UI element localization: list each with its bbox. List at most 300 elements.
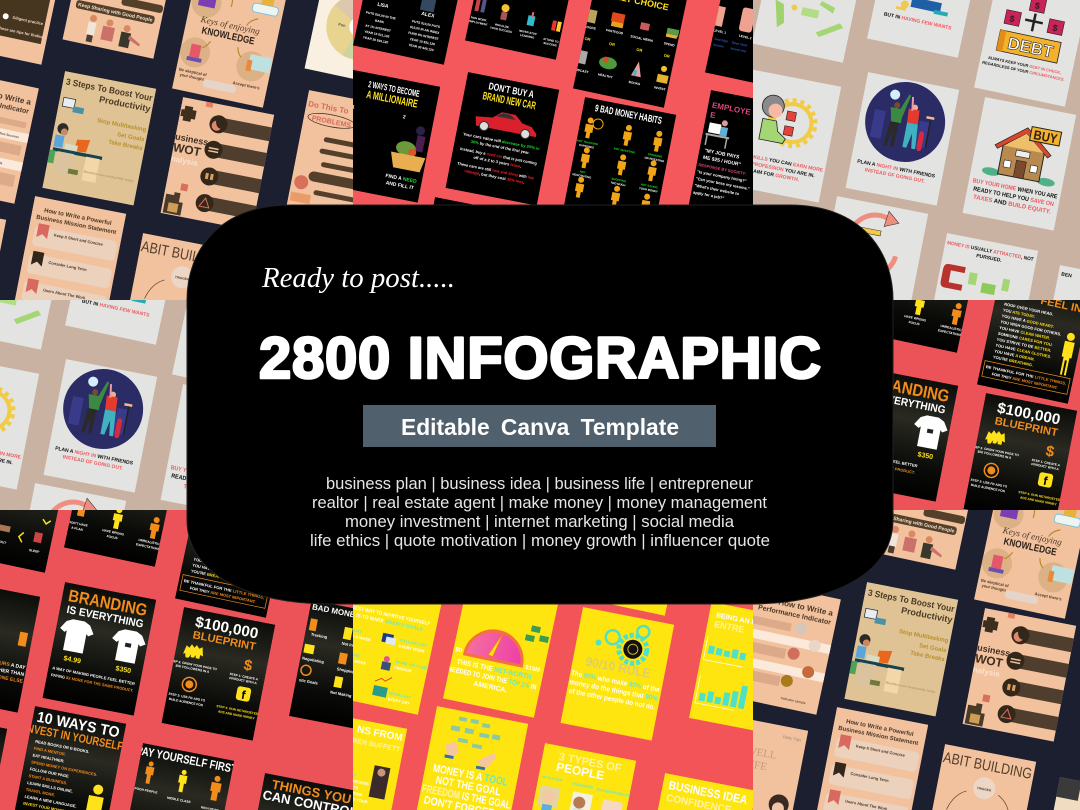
card: having few wants	[867, 0, 970, 58]
card: daily choice: OR	[636, 47, 643, 53]
panel: paper cards on tan, lower left repeat	[0, 300, 186, 510]
card: net worth gauge	[442, 583, 558, 718]
card: well life	[694, 713, 808, 810]
card: 9 bad money habits: SPENDING	[648, 152, 663, 159]
card: 100000 blueprint: STEP 2: USE FB ADS TO	[168, 692, 206, 703]
panel: black cards on red, right middle repeat	[753, 218, 1080, 527]
card: be thankful: FOR THEY ARE MOST IMPORTANT.	[189, 585, 256, 604]
card: daily choice: HEALTHY	[598, 72, 614, 80]
card: 3 steps repeat: 3 Steps To Boost Your	[867, 587, 956, 614]
card: weekly goals: READ ONE	[339, 649, 361, 658]
card: level 1 and level 2: Just high	[714, 37, 729, 44]
card: buy home repeat: TAXES AND BUILD	[183, 484, 238, 500]
card: buy your home: BUY YOUR HOME WHEN YOU ARE	[972, 178, 1058, 201]
card: success habits: YOUR SUCCESS	[490, 25, 512, 34]
panel: black cards on red, lower left	[0, 432, 403, 810]
card: branding is everything: BRANDING	[67, 586, 149, 620]
card: 3 steps to boost your productivity: Take Breaks	[108, 140, 144, 152]
card: keys of enjoying knowledge repeat: your thought	[981, 583, 1007, 593]
card: bad money habits: BAD MONEY	[311, 602, 362, 621]
card: 10 ways to invest in yourself: START A BUSINESS.	[28, 773, 68, 786]
card: grateful in life repeat: YOU HAVE CLEAN CLOTHES.	[995, 342, 1052, 359]
card: branding is everything repeat: BRANDING	[869, 372, 951, 406]
card: branding is everything: $350	[115, 665, 132, 675]
card: grateful in life repeat: YOU WISH GOOD FOR OTHERS.	[1000, 319, 1062, 337]
card: weekly goals: BOOK A WEEK	[338, 655, 367, 666]
card: level 1 and level 2: invest rest	[730, 46, 747, 54]
card: do this to problems: PROBLEMS	[311, 115, 352, 130]
card: level 1 and level 2: LEVEL 1	[713, 28, 727, 35]
card: pay yourself first: MIDDLE CLASS	[167, 796, 191, 804]
card: habit building repeat	[922, 744, 1036, 810]
card: lisa and alex: AT 1% INTEREST	[365, 24, 391, 33]
card: money is attracted: PURSUED.	[976, 253, 1003, 264]
card: bad money habits: Negotiating	[302, 655, 325, 665]
card: bad money habits: Shopping	[336, 666, 356, 675]
card: bad money habits: Not Investing	[341, 641, 368, 650]
card: 9 bad money habits: 9 BAD MONEY HABITS	[594, 103, 663, 127]
card: debt repeat	[172, 307, 186, 378]
card: 2 ways to become a millionaire: 1	[351, 104, 355, 111]
card: 100000 blueprint repeat	[959, 392, 1078, 527]
card: business SWOT analysis: WOT	[172, 140, 203, 159]
card: keys of enjoying knowledge: KNOWLEDGE	[200, 25, 256, 47]
card: 9 bad money habits: SHOPPING	[611, 177, 626, 183]
card: employee: "What's their website to	[694, 183, 740, 196]
card: wrong focus: A PLAN	[71, 526, 84, 532]
card: debt repeat: ALWAYS KEEP YOUR	[197, 344, 249, 361]
card: business ideas	[642, 773, 756, 810]
card: 3 steps to boost your productivity	[42, 71, 156, 206]
card: keys of enjoying knowledge repeat: KNOWLEDGE	[1002, 536, 1058, 558]
card: having few wants: BUT IN HAVING FEW WANTS	[883, 11, 953, 32]
card: net worth gauge: THIS IS THE NET-WORTH	[456, 659, 532, 681]
card: 100000 blueprint: $100,000	[194, 614, 260, 642]
card: 10 ways to invest in yourself: TRAVEL MORE.	[25, 787, 56, 797]
card: weekly goals: MAKE A WEEK	[343, 631, 372, 642]
card: branding is everything repeat	[844, 368, 958, 502]
card: success habits	[465, 0, 568, 60]
card: 100000 blueprint repeat: STEP 1: CREATE A	[1031, 458, 1061, 468]
card: business SWOT analysis	[160, 97, 274, 231]
card: bad money habits	[289, 600, 403, 734]
card: reload arrows repeat	[30, 483, 126, 510]
card: 3 steps repeat	[844, 582, 958, 717]
card: mission statement repeat: Keep It Short and Concise	[855, 743, 906, 758]
card: employee	[688, 90, 753, 204]
card: lessons from: FIRST	[344, 771, 357, 778]
card: 9 bad money habits: YOUR MONEY	[639, 186, 658, 194]
card: wrong focus: DON'T HAVE	[68, 520, 88, 528]
card: lisa and alex: PUTS $10,00 PUTS	[412, 19, 440, 29]
card: keys of enjoying knowledge: Keys of enjoying	[199, 14, 261, 36]
card: daily choice	[569, 0, 688, 108]
card: bottom hidden	[434, 197, 473, 204]
card: 100000 blueprint: 50K FOLLOWERS IN A	[175, 664, 210, 674]
card: 3 types of people: ENGINEER	[572, 781, 593, 790]
card: 3 types of people	[522, 743, 636, 810]
card: 100000 blueprint: STEP 3: GROW YOUR PAGE TO	[169, 658, 218, 671]
panel: peach cards on navy, lower right repeat	[694, 435, 1080, 810]
card: 3 steps repeat: Set Goals	[918, 643, 947, 654]
card: grateful in life repeat: SOMEONE CARES FOR YOU.	[998, 331, 1053, 347]
card: branding is everything: A WAY OF MAKING PEOPLE FEEL BETTER	[52, 665, 135, 686]
card: photo at far right	[1037, 777, 1080, 810]
text block: keyword list	[310, 475, 770, 550]
card: 3 types of people: PEOPLE	[555, 760, 605, 783]
card: buy your home: READY TO HELP YOU SAVE ON	[973, 186, 1054, 208]
card: keys of enjoying knowledge repeat: Keys of enjoying	[1001, 525, 1063, 547]
card: wrong focus repeat: EXPECTATIONS	[938, 328, 962, 337]
card: 2 ways to become a millionaire: 2 WAYS TO BECOME	[368, 79, 420, 99]
card: 10 ways to invest in yourself: READ BOOKS OR E-BOOKS.	[35, 739, 90, 754]
card: don't buy a brand new car: mileage, but they cost 30% less.	[464, 168, 525, 185]
card: 100000 blueprint repeat: STEP 3: GROW YOUR PAGE TO	[971, 444, 1020, 457]
card: buy home repeat	[160, 384, 186, 505]
card: lessons from: ASSETS	[342, 782, 359, 790]
text block: keyword list: money investment | internet marketing | social media	[345, 513, 735, 531]
card: having few wants repeat	[65, 300, 166, 345]
card: reload arrows	[834, 196, 928, 300]
card: mission statement repeat: How to Write a Powerful	[845, 719, 914, 738]
card: buy home repeat: BUY YOUR HOME WHEN YOU ARE	[170, 465, 256, 488]
card: weekly goals: ONE DAY	[344, 626, 363, 634]
card: dark tips box	[0, 0, 56, 65]
card: success habits: SUCCESS	[543, 41, 557, 48]
card: employee: "MY JOB PAYS	[704, 148, 740, 161]
card: 9 bad money habits: NOT TRACKING	[576, 138, 598, 146]
card: daily choice: INVEST	[654, 85, 666, 92]
card: wrong focus: EXPECTATIONS	[136, 542, 160, 551]
card: don't buy a brand new car: These cars are still new and shiny with low	[457, 161, 535, 181]
card: be thankful: BE THANKFUL FOR THE LITTLE THINGS,	[183, 578, 265, 600]
card: daily choice: OR	[663, 53, 670, 59]
card: keys of enjoying knowledge: Accept there's	[232, 80, 261, 91]
card: 3 types of people: INVESTOR	[542, 774, 563, 783]
card: branding is everything: PAYING $X MORE FOR THE SAME PRODUCT.	[51, 672, 134, 693]
card: be thankful: YOU HAVE A DREAM.	[192, 562, 233, 576]
card: branding is everything repeat: $350	[917, 451, 934, 461]
card: 100000 blueprint: ADS AND MAKE MONEY	[218, 709, 256, 721]
card: 2 ways to become a millionaire	[353, 70, 440, 203]
card: well life: Daily Tips	[782, 734, 803, 743]
card: success habits: VISUALIZE	[494, 22, 510, 29]
card: plan a night in repeat	[43, 359, 157, 493]
card: lisa and alex: FUND 8% INTEREST	[408, 31, 439, 41]
card: 100000 blueprint repeat: f	[1042, 474, 1050, 488]
card: plan a night in repeat: PLAN A NIGHT IN WITH FRIENDS	[55, 446, 134, 467]
card: having few wants repeat: BUT IN HAVING FEW WANTS	[81, 298, 151, 319]
card: level 1 and level 2: Save most	[731, 40, 749, 48]
card: lessons from: EMOTIONS	[341, 788, 363, 797]
card: lisa and alex: YEAR 10 $11,130	[364, 30, 390, 39]
card: don't buy a brand new car: DON'T BUY A	[488, 81, 535, 101]
card: 100000 blueprint: $	[242, 657, 254, 675]
card: 100000 blueprint repeat: ADS AND MAKE MONEY	[1020, 495, 1058, 507]
card: plan a night in repeat: INSTEAD OF GOING OUT.	[62, 454, 124, 472]
card: money is a tool: NOT THE GOAL	[435, 774, 502, 799]
card: buy home repeat: READY TO HELP YOU SAVE ON	[171, 473, 252, 495]
card: grateful in life repeat: YOU HAVE A DREAM.	[994, 348, 1035, 362]
card: weekly goals: IS TO MAKE WEEKLY GOALS	[356, 613, 424, 633]
card: keys of enjoying knowledge	[172, 0, 287, 108]
card: buy your home: TAXES AND BUILD EQUITY.	[973, 195, 1052, 216]
card: keep sharing with good people: Keep Sharing with Good People	[77, 2, 153, 24]
card: 10 ways to invest in yourself: LEARN SKILLS ONLINE.	[27, 780, 73, 794]
card: 100000 blueprint: f	[240, 688, 248, 702]
card: employee: EMPLOYE	[711, 101, 752, 117]
card: being an entrepreneur charts: BEING AN E	[715, 612, 757, 627]
card: 10 ways to invest in yourself: LEARN A NEW LANGUAGE.	[24, 794, 77, 809]
card: plan a night in with friends: PLAN A NIGHT IN WITH FRIENDS	[857, 159, 936, 180]
card: right edge: BEN	[1061, 271, 1073, 279]
card: be thankful: YOU HAVE CLEAN CLOTHES.	[193, 556, 250, 573]
card: success habits: LEARNING	[520, 33, 535, 40]
card: 9 bad money habits: NOT	[579, 169, 586, 175]
card: SWOT repeat: nalysis	[972, 665, 1001, 679]
card: wrong focus	[63, 432, 181, 567]
card: employee: E	[709, 110, 717, 120]
card: plan a night in with friends: INSTEAD OF GOING OUT.	[864, 167, 926, 185]
card: 100000 blueprint repeat: STEP 2: USE FB ADS TO	[970, 478, 1008, 489]
text block: keyword list: life ethics | quote motivation | money growth | influencer quote	[310, 532, 770, 550]
card: SWOT repeat: usiness	[976, 642, 1011, 659]
card: 100000 blueprint repeat: STEP 4: RUN RETARGETED	[1018, 490, 1061, 502]
card: 100000 blueprint: STEP 4: RUN RETARGETED	[216, 704, 259, 716]
card: grateful in life repeat: YOU STRIVE TO BE BETTER.	[996, 337, 1052, 353]
card: hours a day	[0, 579, 40, 713]
card: things you can control: THINGS YOU	[271, 777, 353, 807]
card: 10 ways to invest in yourself: FIND A MENTOR.	[33, 746, 66, 757]
card: money is attracted	[934, 233, 1038, 300]
card: 3 steps repeat: Maximize your productivity today	[885, 680, 936, 694]
card: well life edge	[0, 218, 6, 252]
card: performance indicator repeat: Performance Indicator	[757, 604, 832, 627]
card: level 1 and level 2	[705, 0, 753, 83]
card: daily choice: SOCIAL MEDIA	[630, 34, 654, 43]
card: money is a tool: MONEY IS A TOOL	[432, 762, 509, 789]
card: debt	[974, 0, 1080, 107]
card: success habits: NEVER STOP	[519, 29, 537, 36]
card: grateful in life repeat: BE THANKFUL FOR THE LITTLE THINGS,	[985, 364, 1067, 386]
card: mission statement: How to Write a Powerful	[43, 208, 112, 227]
card: pay yourself first: PAY YOURSELF FIRST	[135, 743, 239, 776]
card: gear and checklist: AIM FOR GROWTH.	[753, 169, 800, 183]
card: mission statement repeat: Business Mission Statement	[838, 726, 919, 747]
card: 10 ways to invest in yourself: FOLLOW OUR PAGE	[29, 766, 70, 779]
card: daily choice: OR	[584, 36, 591, 42]
card: lisa and alex	[353, 0, 468, 65]
card: top left partial	[0, 438, 69, 573]
card: habit building repeat: TRIGGER	[977, 786, 992, 793]
card: 3 steps to boost your productivity: Maximize your productivity today	[83, 169, 134, 183]
card: don't buy a brand new car: BRAND NEW CAR	[481, 90, 537, 112]
card: 3 steps to boost your productivity: Productivity	[98, 94, 151, 114]
card: performance indicator repeat: Indicator sample	[780, 696, 806, 705]
card: 9 bad money habits: NOT SAVING	[640, 182, 658, 189]
card: keys of enjoying knowledge repeat: Accept there's	[1034, 591, 1063, 602]
card: 100000 blueprint: BLUEPRINT	[192, 629, 257, 653]
card: business ideas: BUSINESS IDEA	[667, 778, 749, 807]
card: 90/10 rule: 90/10 RULE	[584, 654, 652, 681]
card: daily choice: BOOKS	[628, 80, 641, 86]
card: 10 ways to invest in yourself: SPEND MONEY ON EXPERIENCES.	[31, 759, 98, 777]
card: level 1 and level 2: income	[713, 43, 725, 49]
card: don't buy a brand new car: Your cars value will decrease by 20% in	[463, 131, 541, 151]
card: life wheel pie chart: Health	[355, 45, 369, 52]
panel: yellow cards on red, bottom center	[293, 481, 803, 810]
card: don't buy a brand new car	[445, 72, 559, 206]
card: net worth gauge: $0	[455, 647, 463, 654]
card: bad money habits: Not Making	[330, 689, 353, 698]
card: weekly goals: FOLLOW LIST	[400, 637, 428, 648]
card: 100000 blueprint repeat: BUILD AUDIENCE FOR	[970, 483, 1006, 494]
card: life wheel pie chart: Fun	[338, 22, 347, 28]
card: performance indicator	[0, 69, 39, 204]
card: 2 ways to become a millionaire: 2	[402, 114, 406, 121]
card: 100000 blueprint: PRODUCT WITH A	[229, 676, 258, 685]
card: weekly goals: EVERY WEEK	[398, 643, 425, 654]
card: success habits: NON WORK	[471, 15, 487, 22]
card: weekly goals: READ	[333, 676, 345, 684]
card: employee: "Can your boss my resume."	[695, 176, 750, 191]
card: 10 ways to invest in yourself: INVEST IN YOURSELF	[23, 721, 124, 753]
card: 3 types of people: 3 TYPES OF	[558, 751, 623, 775]
card: money bills	[753, 0, 856, 63]
card: wrong focus repeat: HAVE WRONG	[904, 314, 927, 323]
card: weekly goals: EVERY DAY	[387, 696, 411, 706]
card: success habits: EMPLOYMENT	[468, 19, 488, 27]
card: debt: $	[1052, 23, 1059, 33]
card: mission statement: Keep It Short and Concise	[53, 232, 104, 247]
card: 100000 blueprint repeat: BLUEPRINT	[994, 415, 1059, 439]
card: mission statement repeat	[814, 707, 928, 810]
card: SWOT repeat	[962, 608, 1076, 742]
card: gear and checklist: YOUR SKILLS YOU CAN EARN MORE	[734, 151, 824, 174]
card: branding is everything: IS EVERYTHING	[66, 604, 144, 631]
card: be thankful	[175, 483, 290, 618]
card: daily choice: OR	[609, 41, 616, 47]
card: 2 ways to become a millionaire: A MILLIONAIRE	[365, 89, 419, 111]
card: 2 ways to become a millionaire: AND FILL IT	[385, 180, 414, 191]
card: life wheel pie chart	[304, 0, 353, 79]
card: 3 steps to boost your productivity: 3 Steps To Boost Your	[65, 76, 154, 103]
card: grateful in life repeat	[977, 269, 1080, 408]
card: keep sharing repeat	[864, 435, 980, 570]
card: wrong focus repeat: FOCUS	[908, 320, 920, 326]
card: branding is everything repeat: THE SAME PRODUCT.	[873, 462, 916, 475]
text block: keyword list: business plan | business idea | business life | entrepreneur	[326, 475, 753, 493]
card: debt: DEBT	[1006, 34, 1056, 62]
card: right edge	[1053, 265, 1080, 300]
card: buy your home	[962, 97, 1076, 231]
card: 9 bad money habits	[564, 97, 676, 204]
card: lisa and alex: YEAR 10 $31,128	[409, 37, 435, 46]
card: grateful in life repeat: ROOF OVER YOUR HEAD.	[1004, 301, 1054, 317]
card: branding is everything repeat: IS EVERYTHING	[868, 390, 946, 417]
card: well life: LIFE	[743, 757, 768, 773]
card: lisa and alex: ALEX	[421, 11, 436, 20]
card: left small	[0, 711, 7, 810]
card: SWOT repeat: WOT	[974, 651, 1005, 670]
banner: editable canva template: Editable Canva Template	[401, 414, 679, 440]
card: grateful in life repeat: YOU'RE BREATHING.	[993, 354, 1034, 368]
card: employee: apply for a job?"	[693, 190, 725, 200]
card: wrong focus repeat: UNREALISTIC	[940, 324, 963, 332]
card: employee: "Is your company hiring?"	[697, 169, 747, 183]
card: gear repeat	[0, 356, 39, 490]
card: gear and checklist	[753, 70, 842, 202]
card: 100000 blueprint: STEP 1: CREATE A	[229, 672, 259, 682]
card: lisa and alex: $10,00 IN AN INDEX	[410, 25, 441, 35]
card: bad money habits: stic Goals	[299, 677, 319, 686]
card: top left partial: SLEEP	[29, 548, 41, 554]
card: weekly goals	[327, 580, 442, 715]
card: lessons from	[293, 711, 407, 810]
card: mission statement: Users About The Work	[43, 287, 87, 301]
card: don't buy a brand new car: 30% by the end of the first year.	[470, 139, 530, 155]
card: habit building: TRIGGER	[175, 275, 190, 282]
card: 9 bad money habits: ON INVESTING	[644, 156, 665, 163]
card: gear and checklist: THE PROFESSION YOU ARE IN.	[740, 159, 816, 179]
text: ready to post: Ready to post.....	[261, 263, 455, 294]
card: 100000 blueprint	[157, 606, 276, 741]
card: 100000 blueprint repeat: $	[1044, 443, 1056, 461]
card: daily choice: FASTFOOD	[606, 28, 624, 36]
card: 3 steps repeat: Take Breaks	[910, 651, 946, 663]
card: branding is everything: $4.99	[63, 655, 82, 665]
card: business SWOT analysis: usiness	[174, 131, 209, 148]
card: 90/10 rule: The 90% who make 90% of the	[570, 670, 660, 694]
card: top sliver	[574, 481, 689, 616]
card: wrong focus: FOCUS	[106, 534, 118, 540]
text block: keyword list: realtor | real estate agent | make money | money management	[312, 494, 767, 512]
card: lisa and alex: LISA	[377, 2, 389, 10]
card: lessons from: WARREN BUFFETT	[336, 734, 401, 754]
card: branding is everything	[42, 582, 156, 716]
card: debt: ALWAYS KEEP YOUR DEBT IN CHECK,	[988, 55, 1062, 75]
card: branding is everything repeat: PEOPLE FEEL BETTER	[873, 455, 918, 468]
card: habit building: ABIT BUILDING	[140, 238, 231, 272]
card: grateful in life repeat: FOR THEY ARE MOST IMPORTANT.	[991, 371, 1058, 390]
card: success habits: ATTEND TO	[543, 37, 560, 44]
card: 10 ways to invest in yourself: EAT HEALTHIER.	[32, 752, 65, 764]
card: 3 steps to boost your productivity: Stop Multitasking	[96, 118, 147, 134]
card: 2 ways to become a millionaire: FIND A NEED	[385, 173, 417, 185]
card: keys of enjoying knowledge: your thought	[179, 72, 205, 82]
card: 90/10 rule: money do the things that 90%	[569, 679, 659, 703]
card: 10 ways to invest in yourself: 10 WAYS TO	[35, 709, 121, 742]
card: keys of enjoying knowledge: Be skeptical of	[179, 67, 208, 77]
card: 100000 blueprint repeat: $100,000	[996, 400, 1062, 428]
panel: main black rounded title panel	[187, 205, 893, 604]
card: wrong focus repeat	[866, 218, 983, 353]
card: keep sharing with good people	[62, 0, 166, 59]
card: weekly goals: WORK OUT	[388, 690, 412, 700]
card: being an entrepreneur charts	[689, 602, 803, 736]
card: pay yourself first: POOR PEOPLE	[134, 786, 158, 795]
card: lessons from: BEHIND YOUR	[340, 794, 368, 804]
card: habit building	[130, 233, 203, 300]
panel: paper cards on tan, top right	[753, 0, 1080, 300]
card: dark tips box: Diligent practice	[12, 15, 44, 26]
card: grateful in life repeat: YOU ATE TODAY.	[1003, 307, 1036, 319]
card: lisa and alex: PUTS $10,00 IN THE	[365, 10, 396, 21]
card: don't buy a brand new car: Instead, buy a used car that is just coming	[460, 146, 538, 166]
card: keys of enjoying knowledge repeat	[974, 484, 1080, 619]
card: 9 bad money habits: NOT INVESTING	[613, 146, 636, 155]
card: don't buy a brand new car: off of a 2 to 3 years lease.	[473, 155, 522, 169]
